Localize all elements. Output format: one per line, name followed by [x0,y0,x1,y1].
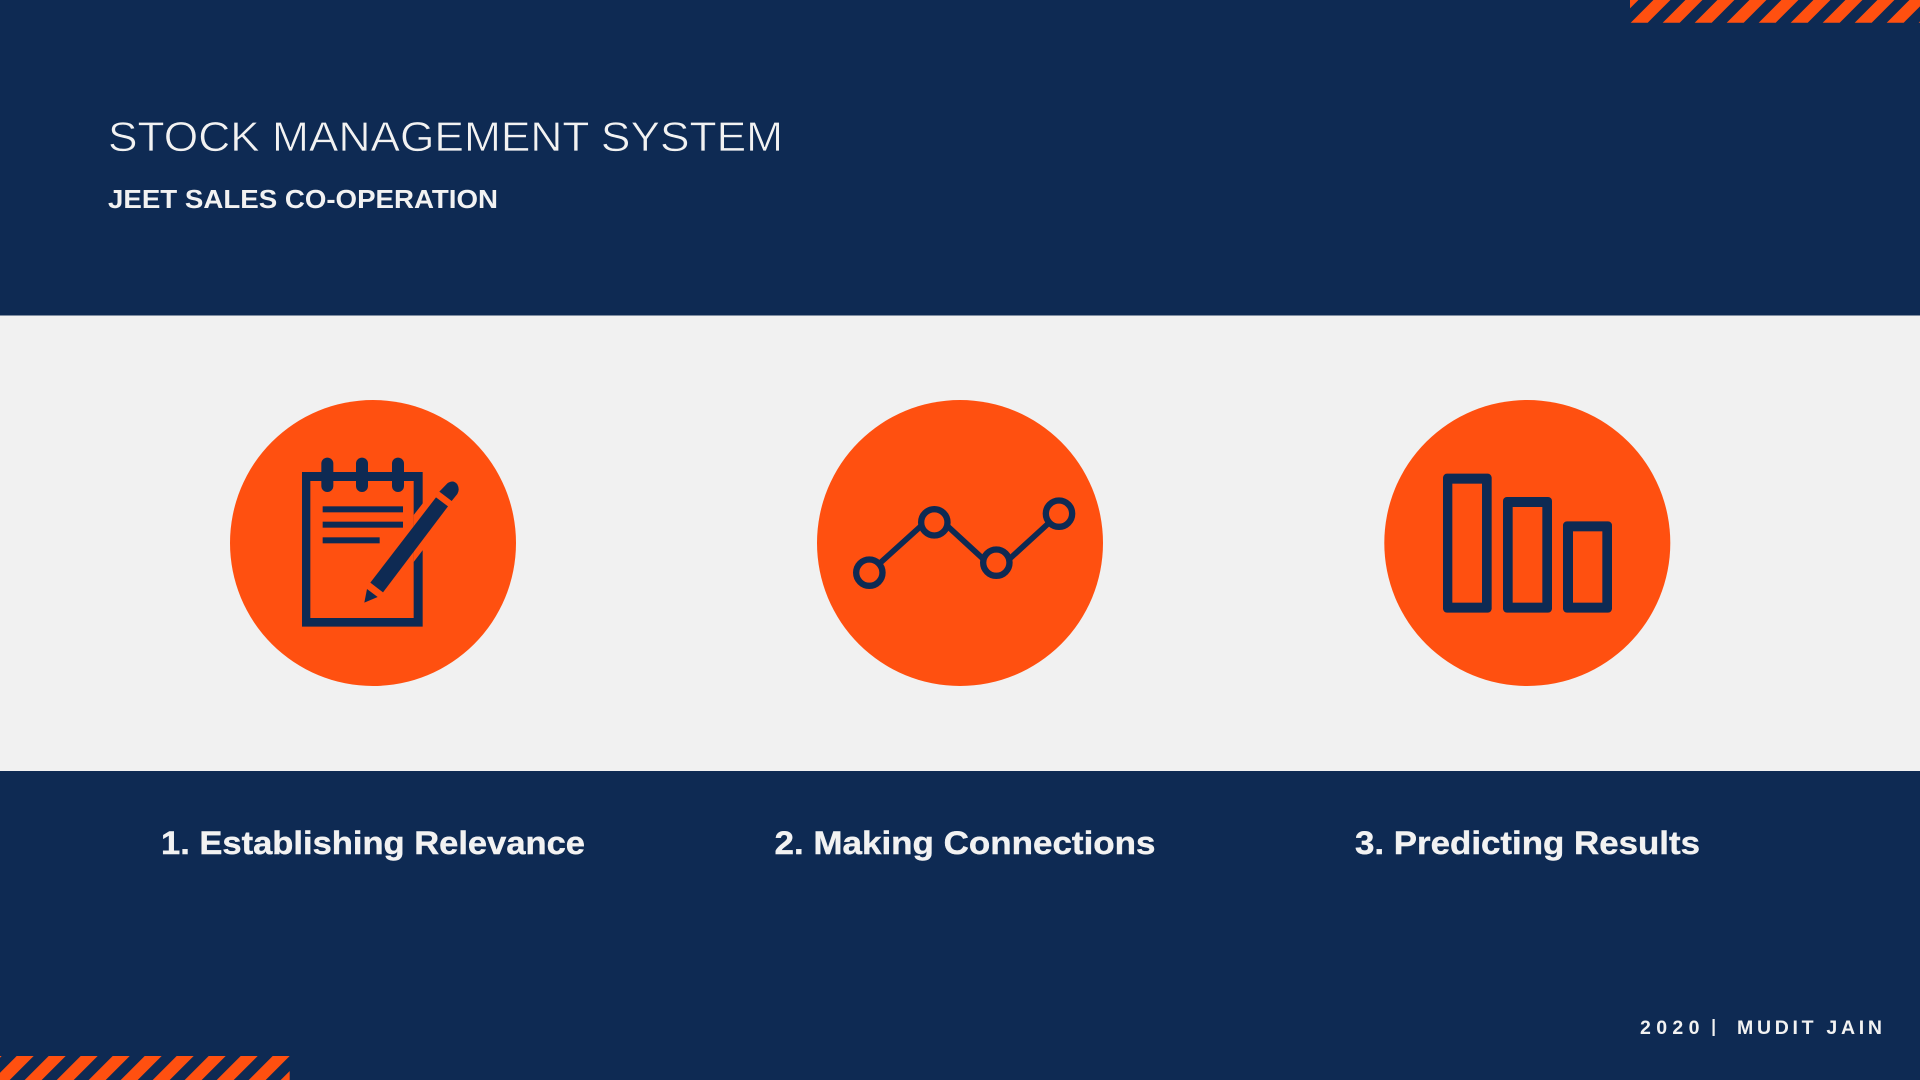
panel: light central band [0,316,1920,771]
label: predicting results: 3. Predicting Results [1355,825,1700,861]
title: STOCK MANAGEMENT SYSTEM [108,113,783,160]
icon: line graph in orange circle [817,400,1103,686]
hazard stripes: bottom left [0,1056,322,1080]
footer: year and author: MUDIT JAIN [1737,1017,1882,1039]
subtitle: JEET SALES CO-OPERATION [108,186,498,214]
footer: year and author [1640,1017,1882,1039]
label: establishing relevance: 1. Establishing Relevance [161,825,585,861]
label: making connections: 2. Making Connections [774,825,1156,861]
icon: notepad and pencil in orange circle [230,400,516,686]
hazard stripes: top right [1599,0,1920,23]
icon: descending bars in orange circle [1384,400,1670,686]
footer: year and author: 2020 [1640,1017,1700,1039]
